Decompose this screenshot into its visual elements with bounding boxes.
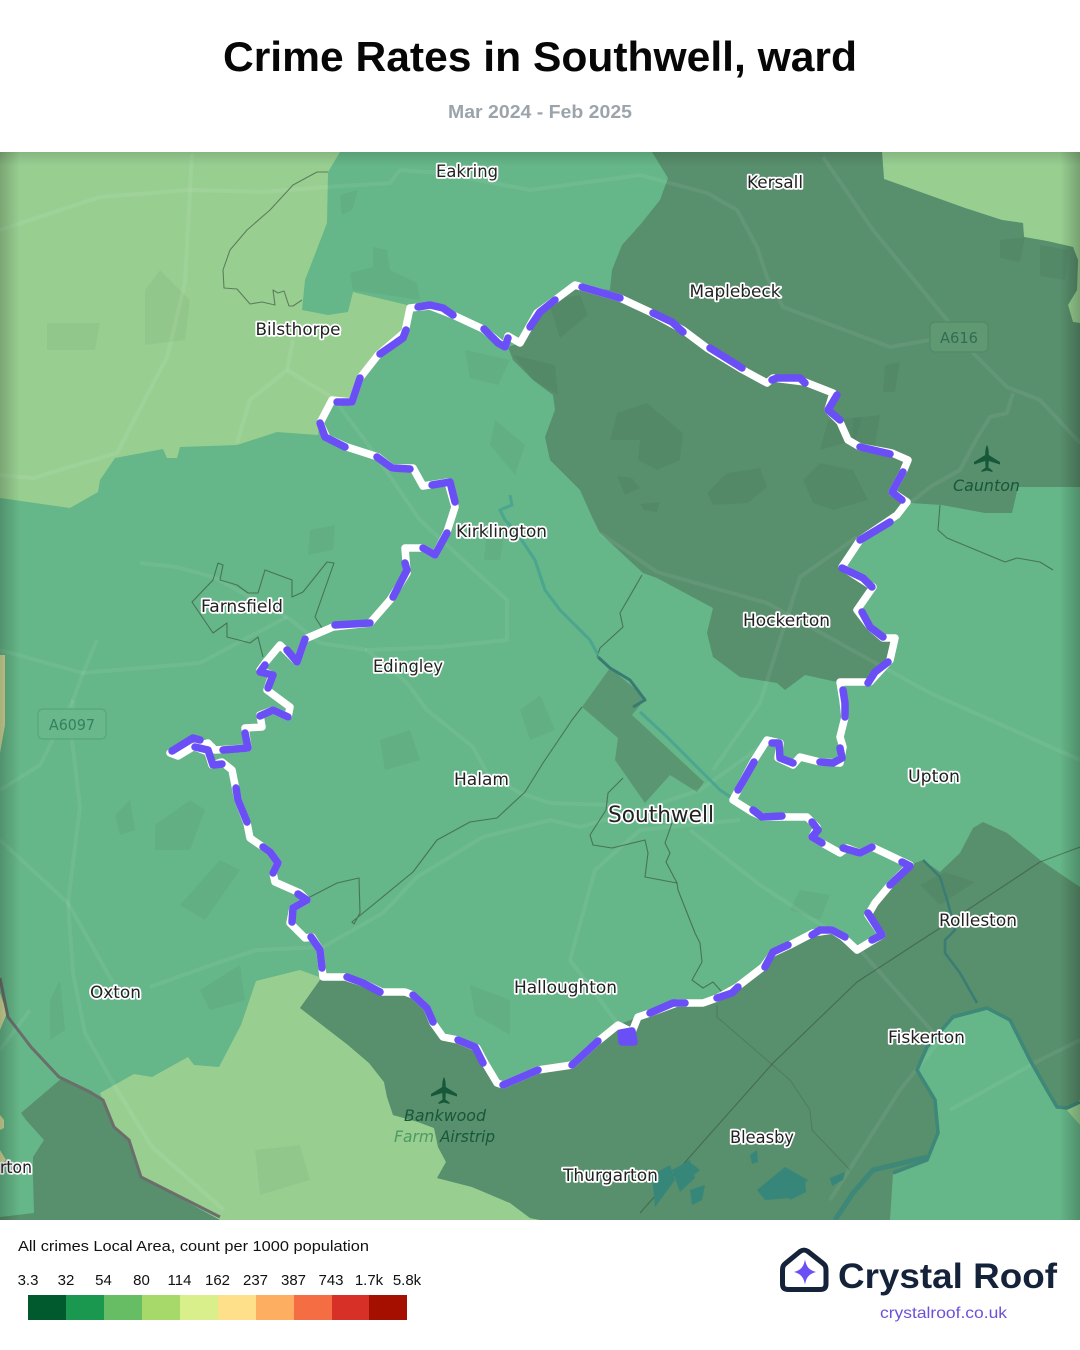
place labels: Oxton [90, 983, 141, 1002]
legend title: All crimes Local Area, count per 1000 population [18, 1238, 369, 1255]
road shield: A6097: A6097 [49, 716, 95, 734]
legend scale labels [18, 1272, 422, 1289]
subtitle: date range: Mar 2024 - Feb 2025 [448, 102, 632, 122]
legend scale labels: 162 [205, 1272, 230, 1289]
legend scale labels: 5.8k [393, 1272, 422, 1289]
region: Southwell town patch [582, 668, 704, 803]
place labels: Maplebeck [690, 282, 781, 301]
place labels: Upton [908, 767, 960, 786]
road network [0, 153, 1080, 1210]
place labels: Thurgarton [562, 1166, 658, 1185]
road shield: A616 [930, 322, 988, 352]
place labels: Hockerton [743, 611, 830, 630]
legend scale labels: 32 [58, 1272, 74, 1289]
place labels [0, 162, 1017, 1185]
airfield labels: Bankwood [404, 1106, 487, 1125]
airfield labels: Caunton [953, 476, 1020, 495]
logo: house icon with star [782, 1250, 826, 1290]
place labels: Bilsthorpe [256, 320, 340, 339]
legend scale labels: 237 [243, 1272, 268, 1289]
title: Crime Rates in Southwell, ward [223, 33, 857, 80]
river network [0, 495, 1080, 1220]
place labels: Kersall [747, 173, 803, 192]
woodland and field patches [852, 417, 862, 440]
map: crime rate choropleth [0, 152, 1080, 1220]
ward boundary: white casing [170, 285, 910, 1085]
ward boundary: purple dashes [172, 287, 910, 1085]
airfield labels [394, 476, 1020, 1146]
logo: wordmark: Crystal Roof [838, 1257, 1057, 1296]
place labels: Kirklington [456, 522, 547, 541]
place labels: Edingley [373, 657, 443, 676]
legend scale labels: 3.3 [18, 1272, 38, 1289]
place labels: Fiskerton [888, 1028, 965, 1047]
region: low-crime north-east corner [882, 152, 1080, 323]
place labels: Farnsfield [201, 597, 283, 616]
region: left edge strips [0, 655, 6, 1162]
place labels: rton [0, 1158, 32, 1177]
road shield: A616: A616 [940, 329, 978, 347]
legend scale labels: 80 [133, 1272, 150, 1289]
legend scale labels: 1.7k [355, 1272, 384, 1289]
region: high-crime south-west area [0, 1078, 220, 1220]
place labels: Halam [454, 770, 509, 789]
place labels: Southwell [608, 803, 714, 828]
icon: Bankwood airstrip plane [431, 1077, 457, 1104]
place labels: Rolleston [939, 911, 1017, 930]
place labels: Halloughton [514, 978, 617, 997]
region: low-crime north-west area [0, 152, 410, 508]
region: low-crime south area [100, 970, 540, 1220]
airfield labels: Farm [394, 1127, 434, 1146]
legend scale labels: 743 [318, 1272, 344, 1289]
airfield labels: Airstrip [439, 1127, 495, 1146]
parish boundaries [192, 172, 1080, 1213]
region: high-crime northern area [508, 152, 1080, 690]
icon: Caunton airfield plane [974, 445, 1000, 472]
map edge shading [0, 152, 1080, 1220]
place labels: Eakring [436, 162, 498, 181]
road shield: A6097 [38, 709, 106, 739]
legend scale labels: 387 [281, 1272, 306, 1289]
legend scale labels: 54 [95, 1272, 112, 1289]
place labels: Bleasby [730, 1128, 794, 1147]
website link: crystalroof.co.uk [880, 1305, 1008, 1322]
legend scale labels: 114 [168, 1272, 191, 1289]
water bodies near Bleasby [652, 1150, 845, 1207]
region: high-crime southern area [300, 822, 1080, 1220]
legend colour bar [28, 1295, 407, 1320]
